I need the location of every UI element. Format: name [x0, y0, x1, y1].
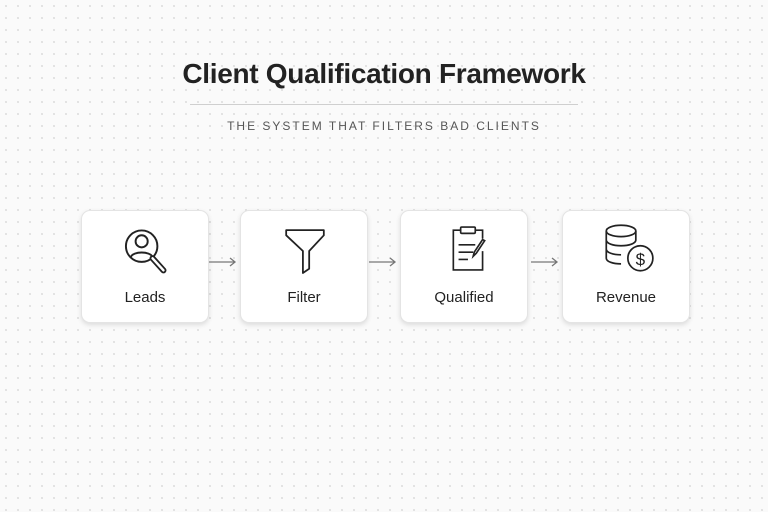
icon: coins dollar	[605, 224, 654, 272]
subtitle: THE SYSTEM THAT FILTERS BAD CLIENTS	[227, 119, 541, 133]
card: Filter	[240, 210, 368, 323]
label: Qualified	[434, 289, 494, 306]
icon: clipboard	[452, 226, 486, 271]
icon: funnel	[285, 229, 325, 274]
label: Filter	[287, 289, 321, 306]
title: Client Qualification Framework	[182, 58, 586, 89]
card: Qualified	[400, 210, 528, 323]
label: Leads	[125, 289, 165, 306]
card: Leads	[81, 210, 209, 323]
arrow	[209, 258, 236, 266]
arrow	[531, 258, 558, 266]
card: Revenue	[562, 210, 690, 323]
icon: person search	[124, 230, 166, 274]
arrow	[369, 258, 396, 266]
icon: coins dollar: $	[636, 250, 646, 269]
label: Revenue	[596, 289, 656, 306]
